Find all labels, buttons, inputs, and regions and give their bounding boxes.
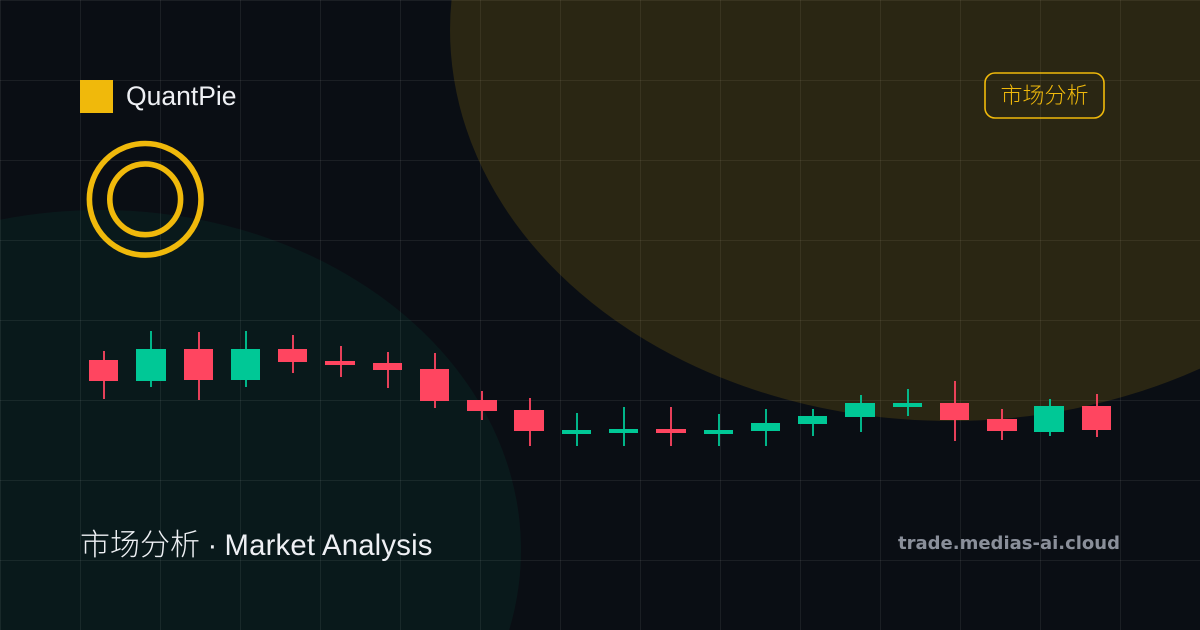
candle 14 bbox=[704, 414, 733, 446]
candle 18 bbox=[893, 389, 922, 416]
candle 6 bbox=[325, 346, 355, 377]
yellow background ellipse bbox=[450, 0, 1200, 421]
candle 8 bbox=[420, 353, 449, 408]
candle 21 bbox=[1034, 399, 1064, 436]
icon: concentric rings bbox=[89, 144, 201, 255]
brand name: QuantPie bbox=[126, 81, 236, 111]
candle 16 bbox=[798, 409, 827, 436]
candle 15 bbox=[751, 409, 780, 446]
candle 17 bbox=[845, 395, 875, 432]
title: 市场分析 bbox=[80, 520, 200, 564]
candle 13 bbox=[656, 407, 686, 446]
candle 5 bbox=[278, 335, 307, 373]
candle 10 bbox=[514, 398, 544, 446]
tag: market analysis bbox=[985, 73, 1104, 118]
tag: market analysis: 市场分析 bbox=[1000, 78, 1089, 110]
candle 20 bbox=[987, 409, 1017, 440]
candle 1 bbox=[89, 351, 118, 399]
candle 12 bbox=[609, 407, 638, 446]
candle 2 bbox=[136, 331, 166, 387]
logo mark bbox=[80, 80, 113, 113]
candle 9 bbox=[467, 391, 497, 420]
candle 22 bbox=[1082, 394, 1111, 437]
candle 7 bbox=[373, 352, 402, 388]
candlestick chart bbox=[89, 331, 1111, 446]
website url: trade.medias-ai.cloud bbox=[898, 533, 1120, 554]
title: · bbox=[208, 529, 217, 562]
candle 19 bbox=[940, 381, 969, 441]
candle 11 bbox=[562, 413, 591, 446]
candle 3 bbox=[184, 332, 213, 400]
teal background ellipse bbox=[0, 210, 521, 630]
candle 4 bbox=[231, 331, 260, 387]
title: Market Analysis bbox=[224, 529, 433, 562]
